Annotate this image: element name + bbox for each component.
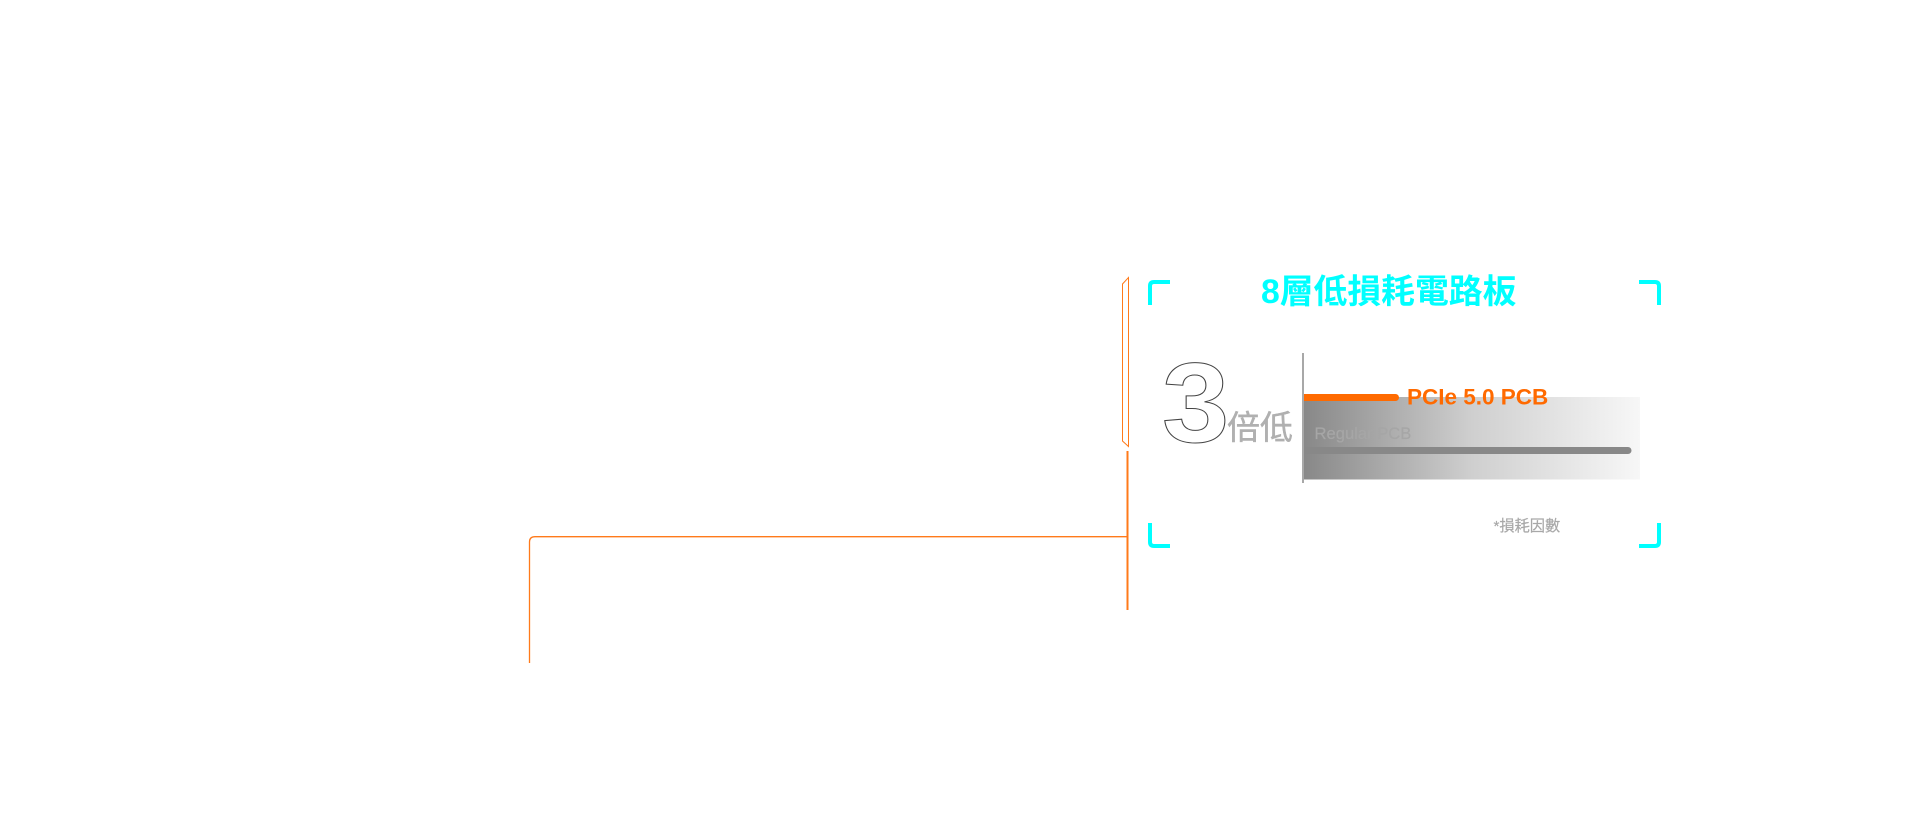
bottom-left bracket (1150, 523, 1170, 546)
PCIe 5.0 PCB label: PCIe 5.0 PCB (1407, 384, 1548, 410)
cyan corner brackets (1150, 282, 1659, 546)
chamfered orange tab (1122, 278, 1128, 446)
gradient background band (1304, 397, 1640, 480)
chart axis (1302, 353, 1304, 483)
footnote: *損耗因數 (1494, 518, 1560, 535)
top-left bracket (1150, 282, 1170, 305)
orange connector lines (530, 278, 1128, 663)
regular PCB label: Regular PCB (1314, 424, 1411, 443)
PCIe 5.0 PCB bar (1304, 394, 1399, 401)
regular PCB bar (1304, 447, 1632, 454)
orange vertical line (1126, 451, 1128, 610)
orange elbow connector (530, 537, 1127, 663)
label: times lower: 倍低 (1227, 409, 1293, 446)
bottom-right bracket (1639, 523, 1659, 546)
comparison bar chart (1302, 353, 1640, 483)
big outlined number 3: 3 (1162, 339, 1229, 466)
title: 8層低損耗電路板 (1261, 273, 1517, 311)
top-right bracket (1639, 282, 1659, 305)
